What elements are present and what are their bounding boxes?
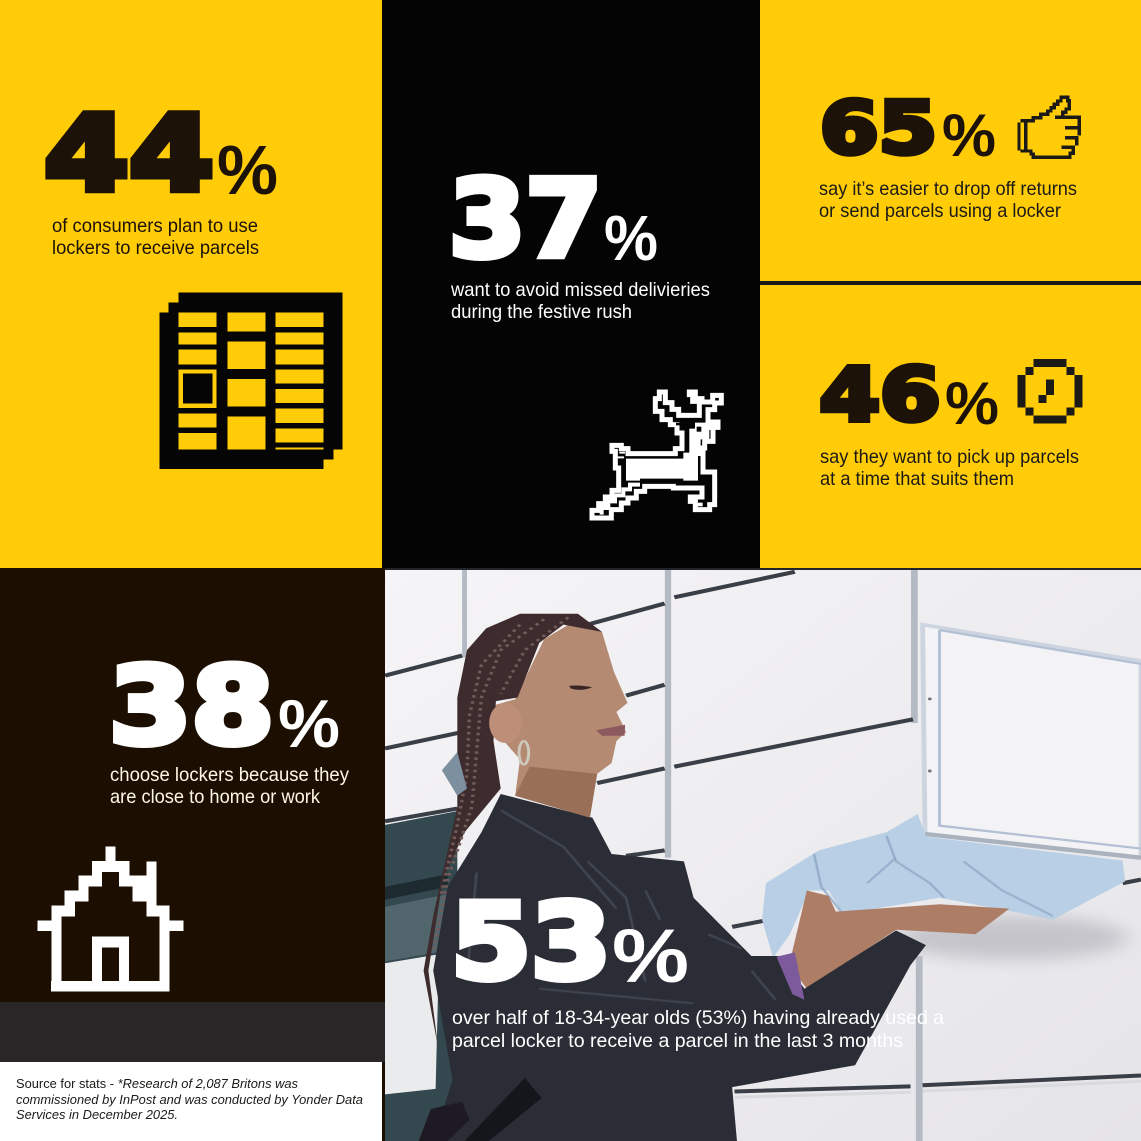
- stat: 46%: [820, 353, 999, 438]
- icon: leaping reindeer: [592, 392, 721, 518]
- band: dark strip above source note: [0, 1002, 385, 1062]
- face and neck: [491, 619, 628, 818]
- eye and lips: [569, 685, 592, 690]
- text: of consumers plan to use lockers: of consumers plan to use: [52, 215, 258, 237]
- panel: 44% plan to use lockers: [0, 0, 382, 568]
- shadow under parcel: [896, 916, 1127, 960]
- panel: 38% close to home or work: [0, 568, 385, 1002]
- panel: 65% easier returns: [760, 0, 1141, 281]
- text: want to avoid missed deliveries: [450, 279, 710, 323]
- text: want to avoid missed deliveries: during the festive rush: [451, 301, 632, 323]
- text: of consumers plan to use lockers: [52, 215, 259, 259]
- stat overlay: 53%: [451, 881, 944, 1052]
- text: close to home or work: [110, 764, 349, 808]
- panel: 46% pick up at a suitable time: [760, 285, 1141, 568]
- stat: 37%: 37: [449, 158, 602, 281]
- parcel: [762, 814, 1125, 958]
- source note: commissioned by InPost and was conducted by Yonder Data: [16, 1092, 363, 1107]
- ear and hoop: [489, 707, 506, 743]
- stat overlay: 53%: %: [612, 914, 689, 999]
- stat: 44%: [44, 93, 278, 215]
- text: easier to drop off returns: [819, 178, 1077, 222]
- stat overlay: 53%: 53: [451, 881, 611, 1003]
- text: pick up parcels at a time: at a time that suits them: [820, 468, 1014, 490]
- stat: 37%: %: [604, 202, 658, 274]
- icon: thumbs up: [1019, 97, 1079, 157]
- icon: pixel house: [38, 846, 183, 992]
- arm and hand: [789, 890, 1009, 989]
- stat: 46%: %: [945, 370, 999, 437]
- shirt and sleeve cuff: [776, 952, 804, 1000]
- source note: Source for stats - *Research of 2,087 Britons was: [16, 1076, 298, 1091]
- source note: [0, 1062, 385, 1141]
- top line above photo: [385, 568, 1141, 571]
- text: want to avoid missed deliveries: want to avoid missed delivieries: [450, 279, 710, 301]
- scrunchie: [442, 752, 467, 796]
- text: over half of 18-34-year olds: over half of 18-34-year olds (53%) having already used a: [452, 1007, 944, 1029]
- photo: woman placing parcel into locker: [385, 570, 1141, 1141]
- text: close to home or work: choose lockers because they: [110, 764, 349, 786]
- hair with braids: [424, 614, 602, 1047]
- text: over half of 18-34-year olds: parcel locker to receive a parcel in the last 3 months: [452, 1030, 903, 1052]
- jacket: [433, 794, 926, 1141]
- stat: 65%: %: [942, 102, 996, 169]
- dark locker unit at left: [385, 811, 457, 1141]
- icon: pixel clock: [1018, 359, 1082, 424]
- icon: parcel locker bank: [159, 293, 343, 469]
- locker wall: [385, 570, 1141, 1141]
- panel: 37% avoid missed deliveries: [382, 0, 760, 568]
- stat: 65%: [820, 86, 996, 170]
- text: easier to drop off returns: say it’s easier to drop off returns: [819, 178, 1077, 200]
- stat: 38%: 38: [109, 645, 274, 768]
- locker door, open: [923, 625, 1141, 858]
- stat: 38%: %: [278, 686, 340, 762]
- text: easier to drop off returns: or send parcels using a locker: [819, 200, 1061, 222]
- divider between right panels: [760, 281, 1141, 285]
- text: pick up parcels at a time: [820, 446, 1079, 490]
- text: close to home or work: are close to home or work: [110, 786, 320, 808]
- stat: 65%: 65: [820, 86, 937, 170]
- stat: 44%: 44: [44, 93, 214, 215]
- stat: 44%: %: [217, 131, 278, 209]
- text: over half of 18-34-year olds: [452, 1007, 944, 1052]
- stat: 46%: 46: [820, 353, 940, 438]
- stat: 38%: [109, 645, 340, 768]
- source note: Services in December 2025.: [16, 1107, 178, 1122]
- text: of consumers plan to use lockers: lockers to receive parcels: [52, 237, 259, 259]
- bag strap: [465, 1078, 542, 1141]
- text: pick up parcels at a time: say they want to pick up parcels: [820, 446, 1079, 468]
